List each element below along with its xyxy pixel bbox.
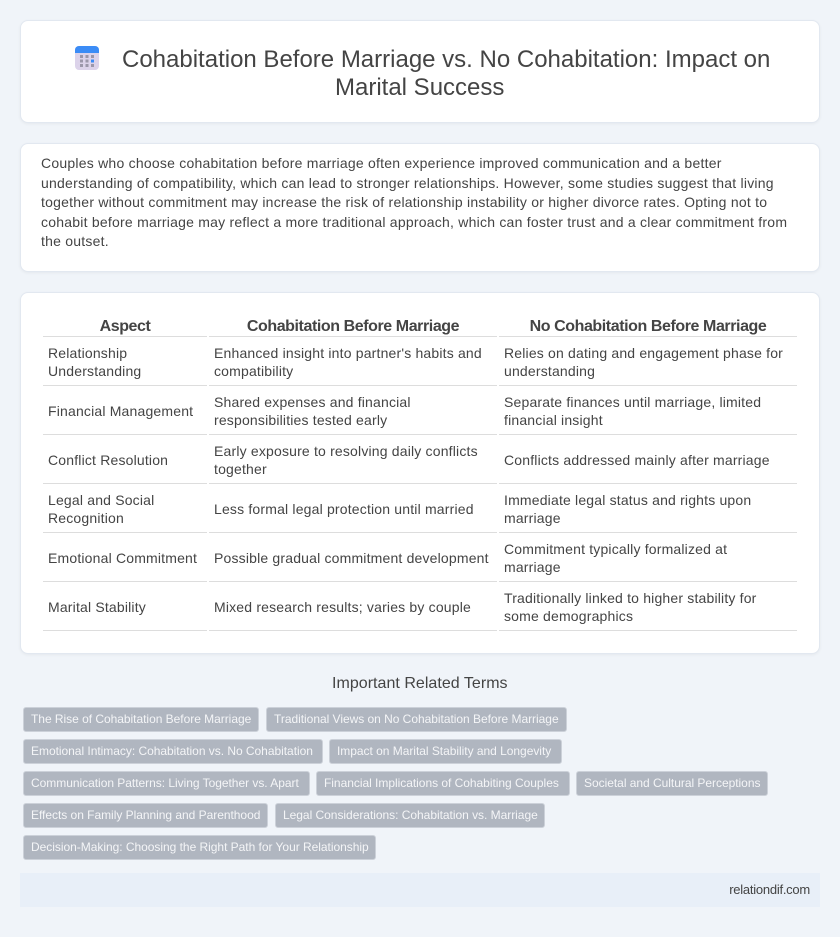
- tag: [23, 707, 259, 732]
- row: financial management: Financial Management: [48, 403, 193, 419]
- row: marital stability: [43, 590, 797, 631]
- row: conflict resolution: Conflicts addressed mainly after marriage: [504, 452, 770, 468]
- row: legal and social recognition: [43, 492, 797, 533]
- panel: introduction: [20, 143, 820, 272]
- row: financial management: Shared expenses and financial: [214, 394, 411, 410]
- row: conflict resolution: Early exposure to resolving daily conflicts: [214, 443, 478, 459]
- tag: Legal Considerations: Cohabitation vs. Marriage: [283, 808, 538, 822]
- text block: introduction: the outset.: [41, 233, 109, 249]
- row: marital stability: some demographics: [504, 608, 633, 624]
- row: financial management: Separate finances until marriage, limited: [504, 394, 761, 410]
- row: emotional commitment: Commitment typically formalized at: [504, 541, 727, 557]
- row: legal and social recognition: Less formal legal protection until married: [214, 501, 474, 517]
- tag: [316, 771, 570, 796]
- row: financial management: [43, 394, 797, 435]
- row: legal and social recognition: Legal and Social: [48, 492, 154, 508]
- title: [122, 46, 770, 101]
- table header row: [43, 318, 797, 631]
- tag: [23, 739, 323, 764]
- tag: Effects on Family Planning and Parenthood: [31, 808, 260, 822]
- row: relationship understanding: Relies on dating and engagement phase for: [504, 345, 783, 361]
- panel: header: [20, 20, 820, 123]
- row: conflict resolution: [43, 443, 797, 484]
- related terms tags: [23, 707, 768, 860]
- table header row: Aspect: [100, 318, 150, 334]
- tag: [23, 835, 376, 860]
- row: legal and social recognition: marriage: [504, 510, 561, 526]
- row: legal and social recognition: Recognition: [48, 510, 124, 526]
- row: marital stability: Marital Stability: [48, 599, 146, 615]
- tag: [23, 803, 268, 828]
- footer: [20, 873, 820, 907]
- tag: Communication Patterns: Living Together vs. Apart: [31, 776, 299, 790]
- tag: Traditional Views on No Cohabitation Before Marriage: [274, 712, 559, 726]
- tag: [329, 739, 562, 764]
- tag: Impact on Marital Stability and Longevity: [337, 744, 551, 758]
- row: relationship understanding: Understanding: [48, 363, 141, 379]
- text block: introduction: together without commitment may increase the risk of relationship instability or higher divorce rates. Opting not to: [41, 194, 767, 210]
- row: conflict resolution: Conflict Resolution: [48, 452, 168, 468]
- row: legal and social recognition: Immediate legal status and rights upon: [504, 492, 751, 508]
- row: relationship understanding: compatibility: [214, 363, 293, 379]
- text: Marital Success: [335, 74, 504, 101]
- tag: Societal and Cultural Perceptions: [584, 776, 760, 790]
- text block: introduction: [41, 155, 787, 249]
- text block: introduction: Couples who choose cohabitation before marriage often experience improved communication and a better: [41, 155, 722, 171]
- tag: [576, 771, 768, 796]
- row: emotional commitment: Emotional Commitment: [48, 550, 197, 566]
- text: Cohabitation Before Marriage vs. No Cohabitation: Impact on: [122, 46, 770, 73]
- comparison table: [43, 318, 797, 631]
- row: relationship understanding: understanding: [504, 363, 595, 379]
- row: relationship understanding: Enhanced insight into partner's habits and: [214, 345, 482, 361]
- tag: The Rise of Cohabitation Before Marriage: [31, 712, 251, 726]
- icon: calendar: [75, 46, 99, 70]
- row: financial management: financial insight: [504, 412, 603, 428]
- tag: [275, 803, 545, 828]
- tag: Decision-Making: Choosing the Right Path for Your Relationship: [31, 840, 369, 854]
- row: marital stability: Mixed research results; varies by couple: [214, 599, 471, 615]
- row: financial management: responsibilities tested early: [214, 412, 387, 428]
- tag: [266, 707, 567, 732]
- table header row: No Cohabitation Before Marriage: [530, 318, 766, 334]
- row: marital stability: Traditionally linked to higher stability for: [504, 590, 757, 606]
- panel: comparison table: [20, 292, 820, 654]
- tag: [23, 771, 310, 796]
- row: conflict resolution: together: [214, 461, 267, 477]
- tag: Emotional Intimacy: Cohabitation vs. No Cohabitation: [31, 744, 313, 758]
- heading: related terms: Important Related Terms: [332, 675, 508, 692]
- text block: introduction: cohabit before marriage may reflect a more traditional approach, which can foster trust and a clear commitment from: [41, 214, 787, 230]
- row: relationship understanding: [43, 345, 797, 386]
- table header row: Cohabitation Before Marriage: [247, 318, 459, 334]
- row: emotional commitment: marriage: [504, 559, 561, 575]
- text block: introduction: understanding of compatibility, which can lead to stronger relationships. However, some studies suggest that living: [41, 174, 774, 190]
- tag: Financial Implications of Cohabiting Couples: [324, 776, 559, 790]
- row: relationship understanding: Relationship: [48, 345, 127, 361]
- row: emotional commitment: [43, 541, 797, 582]
- footer source text: relationdif.com: [729, 882, 810, 897]
- row: emotional commitment: Possible gradual commitment development: [214, 550, 489, 566]
